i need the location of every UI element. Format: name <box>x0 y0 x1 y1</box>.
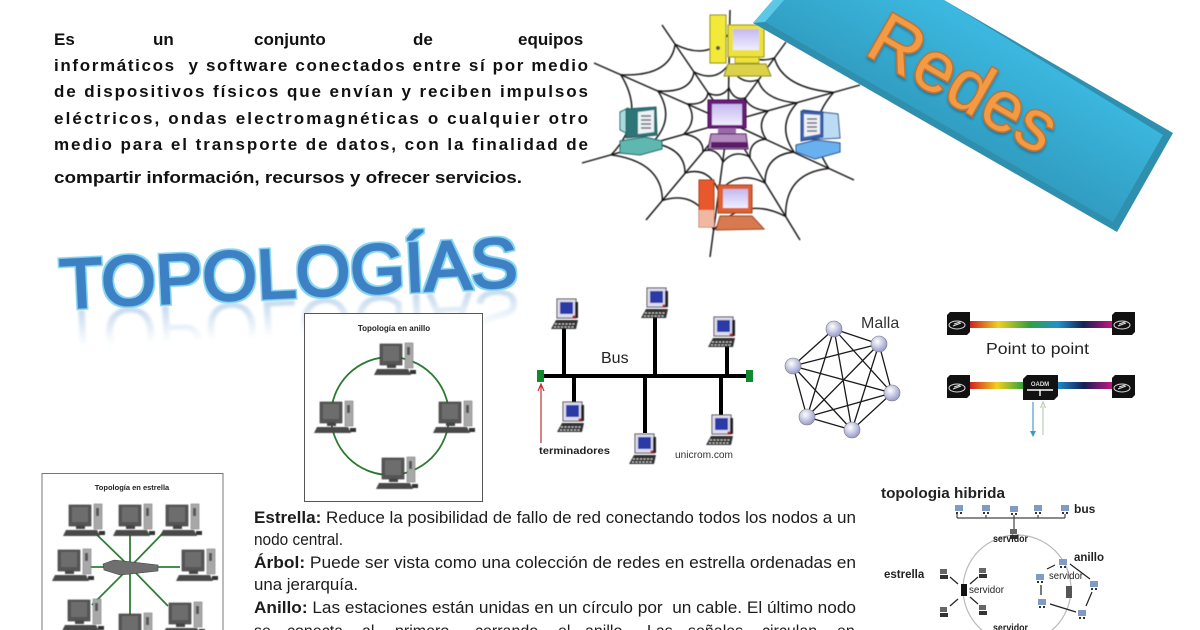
computer: orange <box>699 180 764 230</box>
topology descriptions: Anillo: Las estaciones están unidas en un círculo por un cable. El último nodo <box>254 598 856 617</box>
intro paragraph: eléctricos, ondas electromagnéticas o cualquier otro <box>54 109 588 128</box>
add arrow <box>1040 402 1046 435</box>
topology descriptions <box>254 508 856 630</box>
panel: ring topology <box>304 314 482 502</box>
panel: star topology <box>42 474 223 630</box>
bus segment <box>955 502 1096 539</box>
topology descriptions: una jerarquía. <box>254 575 358 594</box>
topology descriptions: Estrella: Reduce la posibilidad de fallo de red conectando todos los nodos a un <box>254 508 856 527</box>
drop arrow <box>1032 402 1034 432</box>
panel: mesh topology <box>785 315 900 438</box>
mesh nodes <box>785 321 900 438</box>
web strands <box>582 10 860 257</box>
ring computers <box>314 343 475 489</box>
star links <box>84 531 180 615</box>
intro paragraph <box>54 30 588 187</box>
panel: bus topology <box>537 288 753 464</box>
banner title: Redes <box>855 0 1072 169</box>
bus computers <box>551 288 735 464</box>
intro paragraph: Es <box>54 30 75 49</box>
computer: blue <box>796 110 840 159</box>
star segment <box>884 568 1005 617</box>
label: terminadores: terminadores <box>539 445 610 457</box>
spider web network illustration <box>582 10 860 257</box>
large ring <box>963 535 1071 630</box>
ring segment: servidor <box>1049 571 1084 582</box>
label: Point to point: Point to point <box>986 341 1090 358</box>
intro paragraph: medio para el transporte de datos, con la finalidad de <box>54 135 588 154</box>
computer: yellow <box>710 15 771 76</box>
ring title: Topología en anillo <box>358 324 430 333</box>
panel: hybrid topology <box>881 486 1104 630</box>
terminators <box>537 370 753 382</box>
bottom link with OADM: OADM <box>1031 382 1049 388</box>
banner face <box>765 0 1163 222</box>
star title: Topología en estrella <box>95 483 170 492</box>
intro paragraph: conjunto <box>254 30 326 49</box>
intro paragraph: informáticos y software conectados entre sí por medio <box>54 56 588 75</box>
banner bevel <box>753 0 1173 232</box>
computer: purple <box>708 100 748 149</box>
ring segment <box>1036 552 1104 618</box>
star segment: estrella <box>884 569 925 581</box>
panel: point to point <box>947 312 1135 437</box>
label: servidor top: servidor <box>993 533 1028 545</box>
heading: TOPOLOGÍAS: TOPOLOGÍAS <box>58 223 519 323</box>
bus segment: bus <box>1074 502 1096 516</box>
intro paragraph: de <box>413 30 433 49</box>
bottom link with OADM <box>947 375 1135 400</box>
computer: teal <box>620 107 662 155</box>
mesh links <box>793 329 892 430</box>
star hub <box>103 560 158 575</box>
intro paragraph: compartir información, recursos y ofrecer servicios. <box>54 168 522 187</box>
topology descriptions: Árbol: Puede ser vista como una colección de redes en estrella ordenadas en <box>254 553 856 572</box>
heading reflection: TOPOLOGÍAS <box>59 273 523 375</box>
ring segment: anillo <box>1074 552 1104 564</box>
topology descriptions: nodo central. <box>254 530 343 549</box>
label: unicrom.com: unicrom.com <box>675 450 733 461</box>
star computers <box>52 504 218 630</box>
banner: Redes <box>753 0 1173 232</box>
top link <box>947 312 1135 335</box>
intro paragraph: equipos <box>518 30 583 49</box>
intro paragraph: un <box>153 30 174 49</box>
ring cable <box>331 357 449 475</box>
star segment: servidor <box>969 585 1005 596</box>
label: Bus: Bus <box>601 350 629 367</box>
label: Malla: Malla <box>861 315 899 332</box>
hybrid title: topologia hibrida <box>881 486 1006 502</box>
bus cables <box>540 313 750 433</box>
terminator arrow <box>538 384 544 443</box>
intro paragraph: de dispositivos físicos que envían y reciben impulsos <box>54 82 588 101</box>
